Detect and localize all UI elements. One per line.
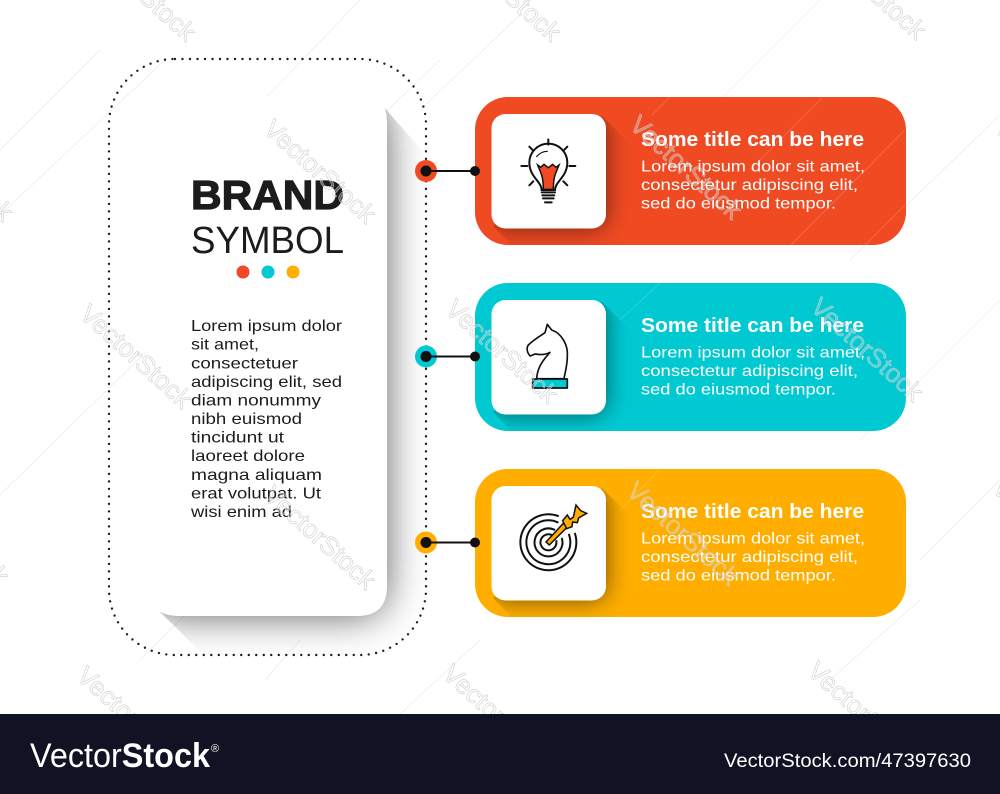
colour dots (236, 266, 300, 278)
card text: orange: sed do eiusmod tempor. (641, 568, 836, 584)
footer bar (0, 714, 1000, 794)
watermarks: VectorStock (440, 293, 565, 410)
watermarks: VectorStock (258, 113, 383, 230)
card text: red: consectetur adipiscing elit, (641, 177, 858, 194)
footer registered mark: ® (211, 743, 219, 755)
card text: orange (641, 501, 865, 584)
panel body text (190, 318, 343, 521)
icon: light bulb (521, 139, 575, 202)
watermarks: VectorStock (258, 479, 383, 596)
card text: cyan: Some title can be here (641, 315, 864, 337)
panel body text: magna aliquam (191, 467, 322, 484)
icon tile: red (492, 114, 606, 228)
watermarks: VectorStock (74, 298, 199, 415)
panel body text: adipiscing elit, sed (191, 374, 342, 391)
heading: brand symbol: BRAND (191, 172, 344, 218)
watermarks: VectorStock (437, 658, 562, 775)
card text: cyan: Lorem ipsum dolor sit amet, (641, 344, 865, 362)
dotted outline (109, 59, 426, 655)
card: cyan (475, 283, 906, 431)
connector: cyan (415, 346, 480, 368)
watermarks: VectorStock (621, 475, 746, 592)
card text: red: Some title can be here (641, 129, 864, 151)
panel body text: wisi enim ad (190, 504, 292, 521)
panel body text: nibh euismod (191, 411, 302, 428)
card text: cyan (641, 315, 865, 398)
icon: chess knight (527, 324, 567, 388)
panel body text: sit amet, (191, 336, 259, 354)
panel body text: tincidunt ut (191, 430, 285, 446)
card text: orange: Some title can be here (641, 501, 864, 523)
card text: orange: consectetur adipiscing elit, (641, 549, 858, 566)
main panel shadow (146, 96, 387, 616)
card text: cyan: sed do eiusmod tempor. (641, 382, 836, 398)
card text: red (641, 129, 865, 212)
card: orange (475, 469, 906, 617)
footer logo: VectorStock (30, 737, 211, 775)
footer image id: VectorStock.com/47397630 (724, 750, 971, 772)
watermarks: VectorStock (805, 291, 930, 408)
card text: red: sed do eiusmod tempor. (641, 196, 836, 212)
card text: orange: Lorem ipsum dolor sit amet, (641, 530, 865, 548)
card: red (475, 97, 906, 245)
watermarks: VectorStock (624, 109, 749, 226)
icon: target with arrow (520, 505, 587, 570)
icon tile: orange (492, 486, 606, 600)
panel body text: diam nonummy (191, 392, 321, 410)
card text: cyan: consectetur adipiscing elit, (641, 363, 858, 380)
panel body text: consectetuer (191, 356, 299, 372)
connector: red (415, 160, 480, 182)
main white panel (145, 96, 387, 616)
panel body text: erat volutpat. Ut (191, 486, 322, 502)
watermarks: VectorStock (71, 660, 196, 777)
connector: orange (415, 532, 480, 554)
icon tile: cyan (492, 300, 606, 414)
watermarks: VectorStock (802, 655, 927, 772)
panel body text: laoreet dolore (191, 448, 305, 465)
panel body text: Lorem ipsum dolor (191, 318, 343, 335)
heading: brand symbol: SYMBOL (191, 220, 344, 262)
card text: red: Lorem ipsum dolor sit amet, (641, 158, 865, 176)
heading: brand symbol (191, 172, 344, 262)
